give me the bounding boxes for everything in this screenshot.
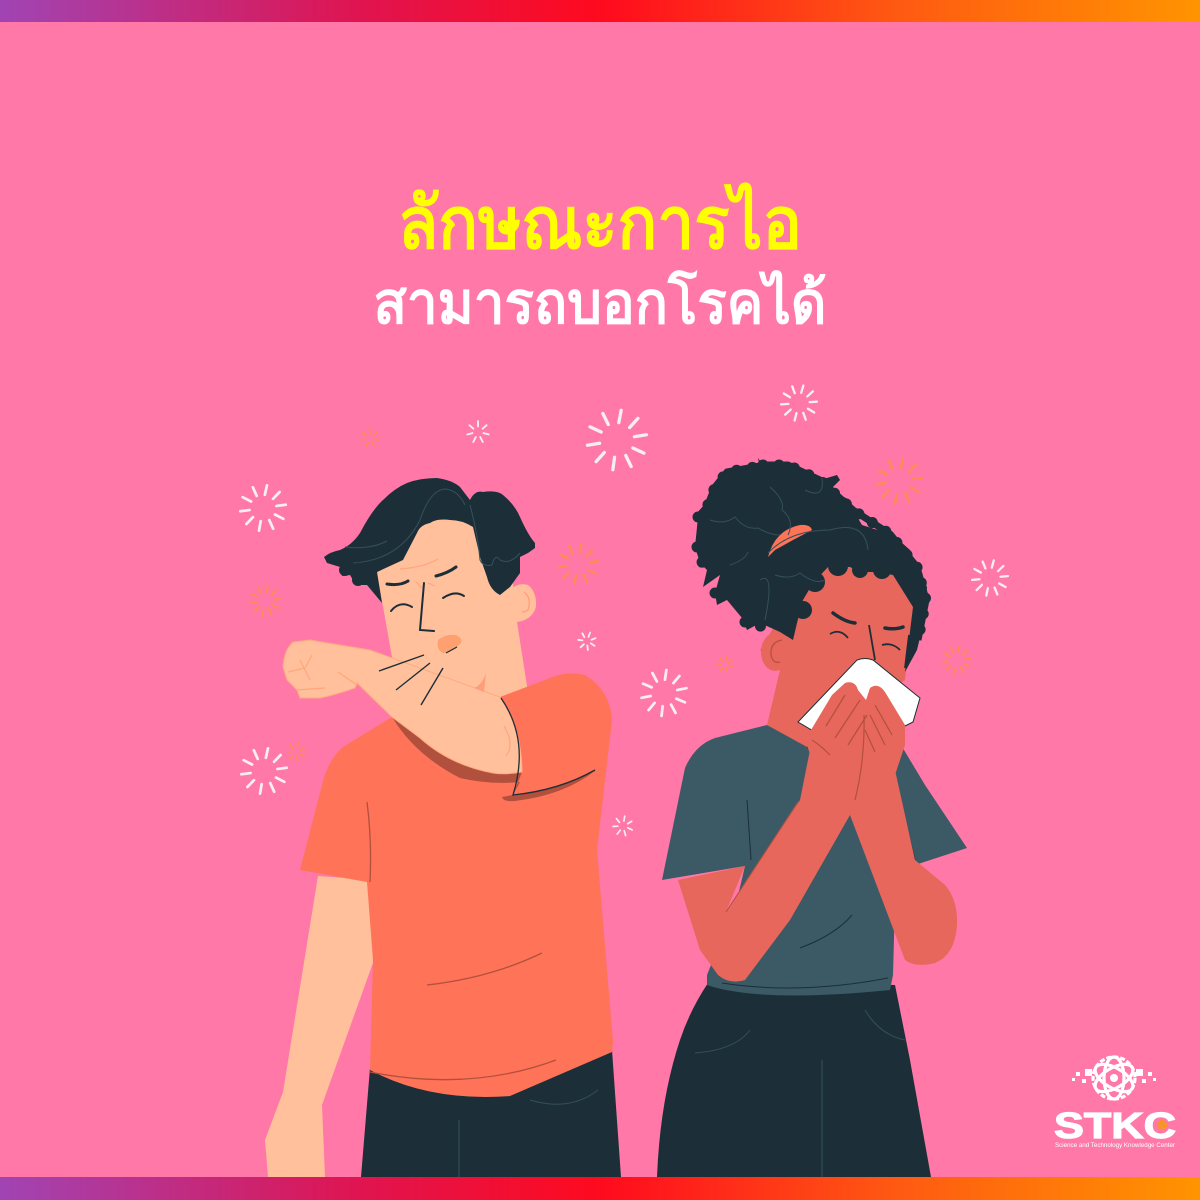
title: ลักษณะการไอ <box>398 181 802 264</box>
woman face details <box>833 613 903 629</box>
woman hair band <box>768 525 812 557</box>
man character <box>265 478 621 1177</box>
woman hair <box>695 458 927 672</box>
woman neck and face <box>760 560 913 747</box>
woman ear <box>761 633 789 671</box>
man ear <box>510 584 536 622</box>
title: สามารถบอกโรคได้ <box>374 268 826 336</box>
man hair <box>324 478 535 603</box>
cough lines <box>379 655 443 705</box>
bottom gradient bar <box>0 1177 1200 1200</box>
man hanging arm <box>265 876 374 1177</box>
sparkles: white <box>237 381 1010 837</box>
man pants <box>361 1050 621 1177</box>
logo <box>1054 1057 1176 1149</box>
man face details <box>387 567 456 585</box>
title <box>374 181 826 336</box>
man neck and face <box>377 520 530 705</box>
sparkles: orange <box>248 429 973 762</box>
woman right arm <box>850 770 957 965</box>
woman hands <box>808 682 905 815</box>
logo atom <box>1072 1057 1156 1099</box>
man mouth <box>438 635 461 653</box>
man arm shadow <box>392 717 596 801</box>
woman hair curls <box>710 478 868 620</box>
man sleeve edge <box>501 698 595 795</box>
woman character <box>657 458 967 1177</box>
tissue <box>798 658 920 740</box>
logo wordmark: STKC <box>1054 1105 1176 1146</box>
top gradient bar <box>0 0 1200 22</box>
man raised arm <box>283 640 522 774</box>
woman shirt <box>662 725 967 995</box>
woman pants <box>657 983 931 1177</box>
logo orange dot <box>1157 1120 1167 1130</box>
logo tagline: Science and Technology Knowledge Center <box>1055 1143 1175 1149</box>
man neck shadow <box>474 673 486 692</box>
woman left arm <box>678 750 862 982</box>
man shirt <box>300 673 613 1097</box>
